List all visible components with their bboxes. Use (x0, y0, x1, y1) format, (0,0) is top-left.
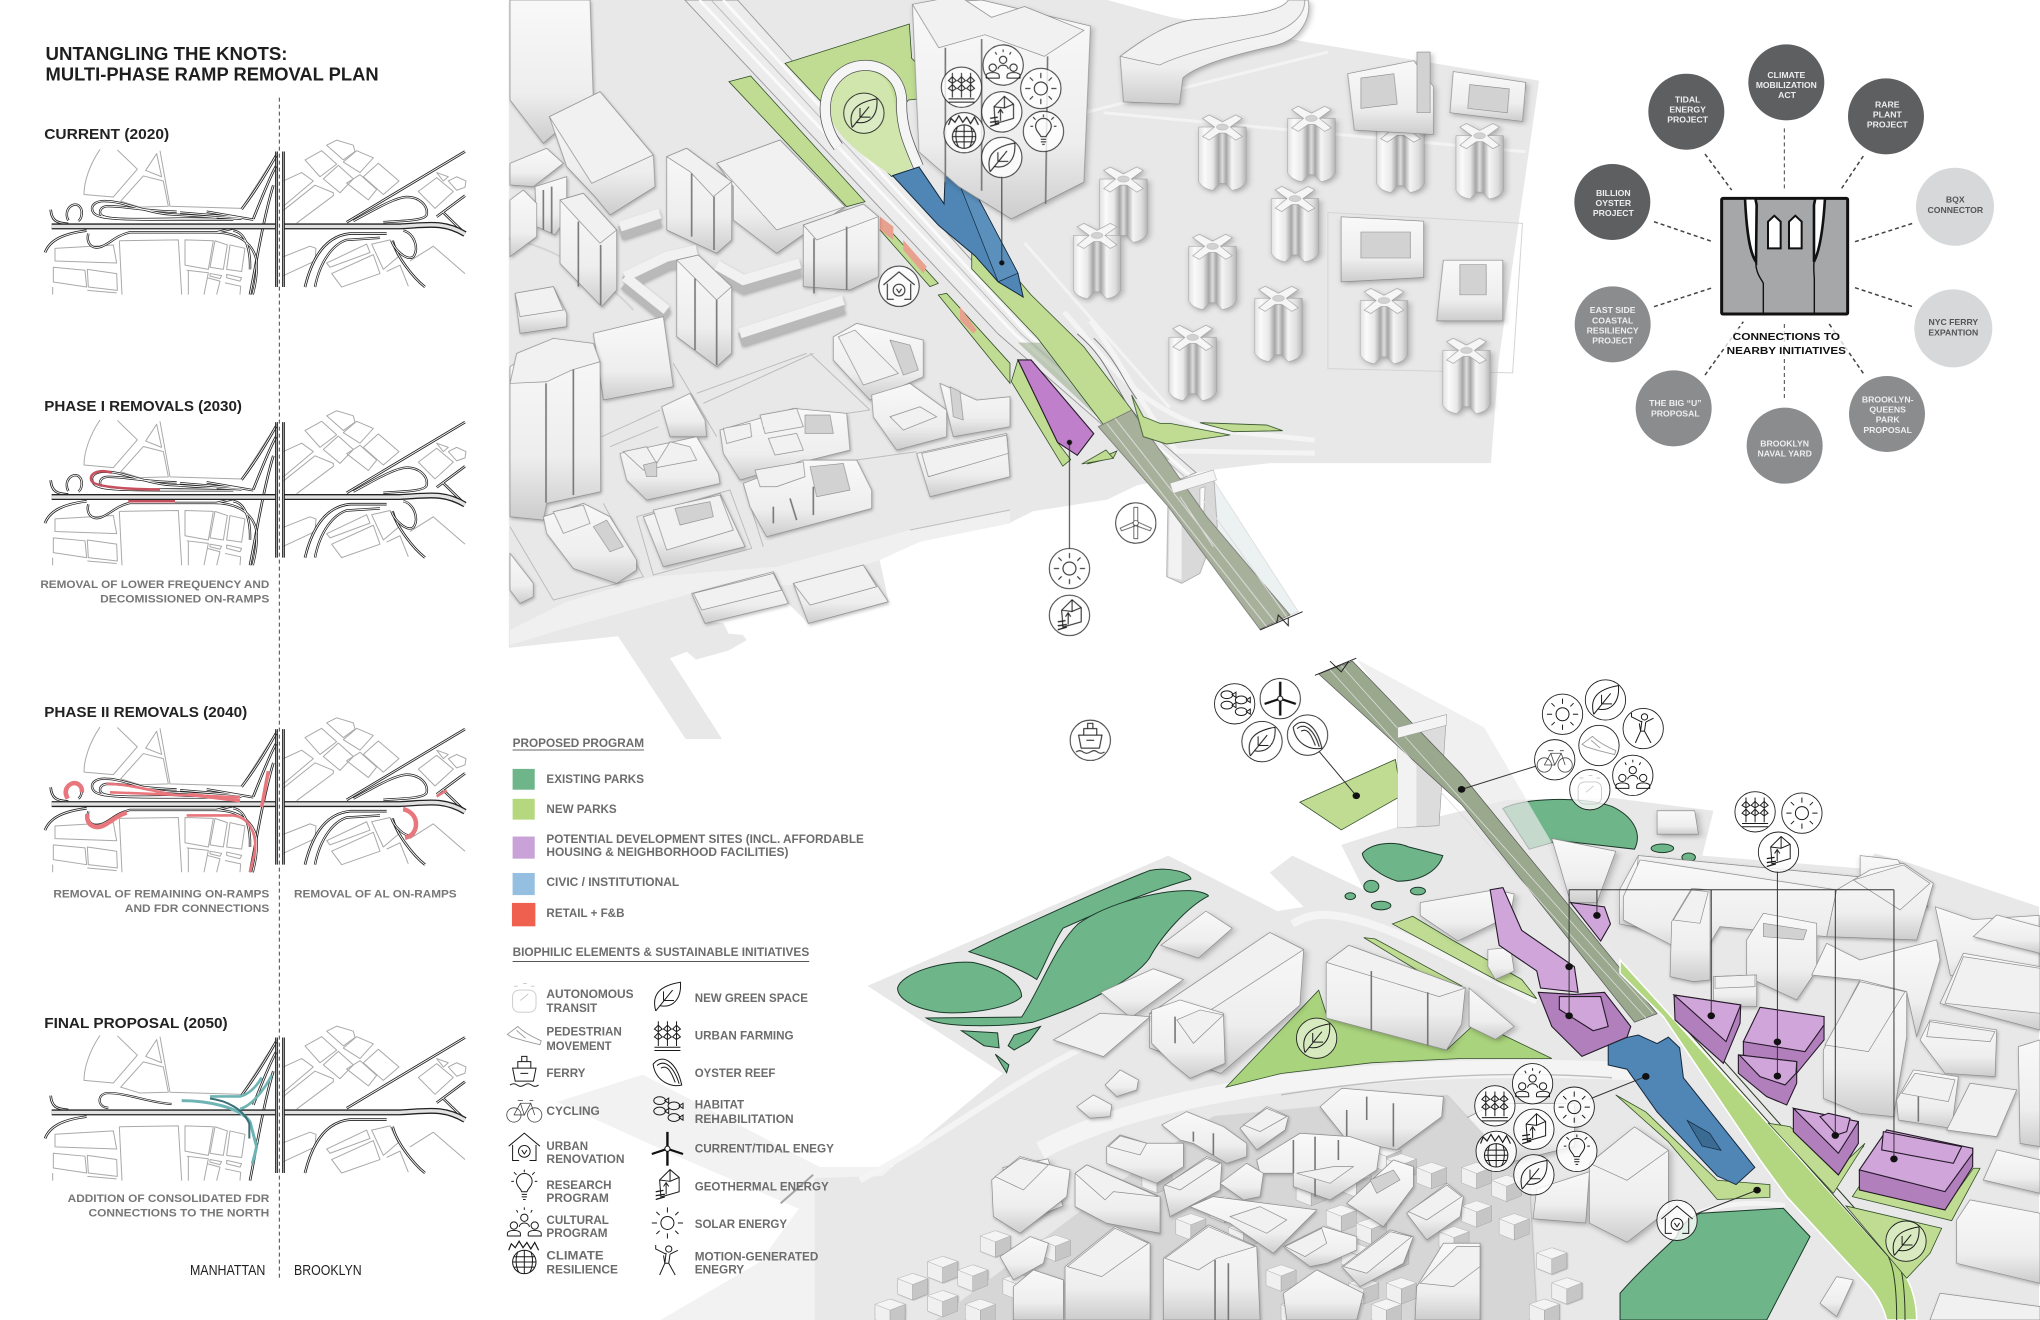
initiative: NYC Ferry Expantion: NYC FERRY (1928, 317, 1978, 327)
caption: phase II Manhattan: REMOVAL OF REMAINING ON-RAMPS (53, 889, 270, 901)
viaduct green deck (1620, 960, 1917, 1320)
initiative: Brooklyn-Queens Park Proposal: PROPOSAL (1863, 425, 1913, 435)
icon: new green space (1886, 1221, 1926, 1261)
initiative: Billion Oyster Project: BILLION (1596, 188, 1631, 198)
legend item: habitat rehabilitation: REHABILITATION (695, 1113, 794, 1126)
initiative: The Big "U" Proposal: PROPOSAL (1651, 408, 1700, 418)
callout lines (1319, 751, 1894, 1214)
Brooklyn Bridge tower and deck (Manhattan span) (1082, 395, 1303, 630)
lower map callouts (1070, 678, 1926, 1261)
road diagram: final proposal (45, 1026, 466, 1181)
legend item: geothermal energy: GEOTHERMAL ENERGY (695, 1180, 829, 1193)
legend item: civic / institutional: CIVIC / INSTITUTIONAL (546, 876, 679, 889)
initiative: Climate Mobilization Act (1748, 44, 1824, 120)
initiative: Tidal Energy Project: ENERGY (1669, 105, 1706, 115)
teardrop lawn (826, 70, 913, 177)
label: connections to nearby initiatives (1725, 328, 1848, 357)
X-plan towers (1073, 106, 1503, 414)
caption: phase I: REMOVAL OF LOWER FREQUENCY AND (40, 579, 269, 591)
initiative: Billion Oyster Project (1574, 164, 1650, 240)
initiative: East Side Coastal Resiliency Project: EAST SIDE (1590, 305, 1636, 315)
legend item: urban renovation: URBAN (546, 1140, 588, 1153)
icon: climate resilience (1476, 1131, 1516, 1172)
legend item: motion-generated energy: MOTION-GENERATED (695, 1251, 818, 1264)
initiative: Climate Mobilization Act: MOBILIZATION (1756, 80, 1817, 90)
icon: motion-generated energy (1623, 708, 1663, 749)
legend item: new green space: NEW GREEN SPACE (695, 992, 808, 1005)
parks: new parks alongside highway (729, 24, 1010, 383)
caption: phase I: DECOMISSIONED ON-RAMPS (100, 593, 270, 605)
legend item: retail: RETAIL + F&B (546, 907, 624, 920)
initiative: East Side Coastal Resiliency Project (1575, 286, 1651, 362)
legend item: geothermal energy (656, 1170, 829, 1200)
caption: phase II Manhattan (53, 889, 270, 915)
legend item: research program: RESEARCH (546, 1179, 611, 1192)
pale pier structures beneath legend (557, 1075, 899, 1320)
icon: urban renovation (879, 266, 919, 306)
map: Brooklyn waterfront and DUMBO (bottom) (557, 658, 2040, 1320)
road diagram: phase II (45, 718, 466, 872)
initiative: Billion Oyster Project: PROJECT (1593, 208, 1634, 218)
east Brooklyn blocks (1620, 860, 2040, 1320)
south-west low-rise blocks (510, 323, 1010, 623)
caption: phase II Manhattan: AND FDR CONNECTIONS (125, 903, 270, 915)
caption: final proposal: ADDITION OF CONSOLIDATED FDR (68, 1193, 269, 1205)
initiative: Rare Plant Project: PLANT (1873, 109, 1902, 119)
icon: habitat rehabilitation (1215, 684, 1255, 724)
icon: new green space (1585, 680, 1626, 720)
icon: current/tidal energy (1116, 503, 1156, 543)
existing park at south (1620, 1208, 1810, 1320)
icon: geothermal energy (1514, 1109, 1554, 1149)
legend item: cultural program (507, 1207, 609, 1240)
caption: phase I (40, 579, 270, 605)
legend item: civic / institutional (513, 873, 679, 895)
caption: final proposal (68, 1193, 269, 1219)
ramps on the Brooklyn side (1064, 312, 1315, 453)
heading: phase I: PHASE I REMOVALS (2030) (44, 398, 242, 415)
legend item: cycling (507, 1101, 600, 1122)
north Brooklyn buildings (1003, 811, 2039, 1242)
Civic building (blue) (893, 167, 1023, 297)
icon: geothermal energy (982, 92, 1022, 132)
icon: urban farming (1475, 1086, 1515, 1126)
legend item: existing parks (513, 769, 644, 790)
legend item: solar energy (652, 1207, 787, 1239)
icon: cycling (1535, 740, 1575, 780)
heading: final proposal: FINAL PROPOSAL (2050) (44, 1015, 228, 1032)
legend item: pedestrian movement: PEDESTRIAN (546, 1026, 622, 1039)
panel: connections to nearby initiatives (1574, 44, 1994, 484)
DUMBO city blocks (992, 1000, 1480, 1320)
initiative: BQX Connector: BQX (1946, 195, 1965, 205)
icon: research program (1557, 1131, 1597, 1172)
initiative: Tidal Energy Project: TIDAL (1675, 95, 1701, 105)
heading: current: CURRENT (2020) (44, 126, 169, 143)
low snake blocks (620, 213, 843, 340)
heading: phase II: PHASE II REMOVALS (2040) (44, 704, 247, 721)
caption: phase II Brooklyn: REMOVAL OF AL ON-RAMPS (294, 889, 457, 901)
civic building (blue) (1608, 1035, 1755, 1185)
new park beneath development (1852, 1168, 1980, 1221)
new park south (1846, 1206, 1942, 1278)
initiative: Brooklyn-Queens Park Proposal (1849, 376, 1925, 452)
north-west towers and slabs (510, 0, 878, 400)
icon: new green space (1242, 721, 1282, 762)
initiative: Brooklyn Naval Yard: NAVAL YARD (1757, 449, 1812, 459)
icon: new green space (982, 137, 1022, 178)
north-east buildings (912, 0, 1526, 321)
ground plane (815, 798, 2039, 1320)
initiative: Tidal Energy Project: PROJECT (1667, 115, 1709, 125)
highway band (685, 0, 1196, 483)
development sites (purple, east of viaduct) (1674, 995, 1973, 1210)
icon: solar energy (1021, 68, 1061, 109)
legend item: climate resilience: CLIMATE (546, 1249, 604, 1262)
initiative: Rare Plant Project (1848, 78, 1924, 154)
legend item: oyster reef: OYSTER REEF (695, 1067, 775, 1080)
new park beside development (1768, 1123, 1865, 1193)
icon: ferry (1070, 720, 1110, 760)
initiative: East Side Coastal Resiliency Project: COASTAL (1592, 315, 1634, 325)
icon: new green space (1296, 1018, 1337, 1058)
title (46, 43, 379, 85)
initiative: BQX Connector: CONNECTOR (1927, 205, 1984, 215)
panel: ramp removal plan (40, 43, 466, 1279)
legend item: pedestrian movement (507, 1026, 622, 1053)
legend item: urban renovation: RENOVATION (546, 1153, 624, 1166)
icon: geothermal energy (1049, 595, 1090, 636)
icon: Brooklyn Bridge tower (1722, 198, 1848, 314)
legend item: climate resilience: RESILIENCE (546, 1264, 618, 1277)
top map callouts (844, 45, 1156, 636)
initiative: East Side Coastal Resiliency Project: RESILIENCY (1587, 326, 1639, 336)
icon: geothermal energy (1758, 832, 1799, 872)
development sites (purple, west of viaduct) (1490, 888, 1631, 1056)
initiative: Climate Mobilization Act: CLIMATE (1767, 70, 1805, 80)
legend item: research program (511, 1170, 611, 1205)
icon: cultural program (1613, 755, 1653, 796)
icon: solar energy (1782, 793, 1822, 833)
legend item: urban farming (654, 1021, 794, 1051)
initiative: Brooklyn Naval Yard: BROOKLYN (1760, 438, 1809, 448)
Development site (purple) (1018, 360, 1094, 455)
legend item: new parks: NEW PARKS (546, 803, 617, 816)
legend item: autonomous transit: TRANSIT (546, 1002, 598, 1015)
existing parks (897, 798, 1696, 1074)
icon: new green space (1514, 1155, 1554, 1195)
icon: urban farming (1735, 792, 1775, 832)
label: Manhattan: MANHATTAN (190, 1263, 265, 1279)
looping ramp (825, 65, 918, 167)
icon: research program (1023, 111, 1064, 152)
legend item: potential development sites: HOUSING & NEIGHBORHOOD FACILITIES) (546, 846, 789, 859)
legend item: autonomous transit: AUTONOMOUS (546, 988, 634, 1001)
heading: biophilic elements: BIOPHILIC ELEMENTS & SUSTAINABLE INITIATIVES (513, 946, 809, 959)
initiative: Brooklyn Naval Yard (1747, 408, 1823, 484)
legend item: pedestrian movement: MOVEMENT (546, 1040, 612, 1053)
legend item: climate resilience (509, 1241, 618, 1277)
legend item: potential development sites (513, 833, 864, 859)
legend item: cycling: CYCLING (546, 1105, 600, 1118)
legend item: urban farming: URBAN FARMING (695, 1030, 794, 1043)
legend item: existing parks: EXISTING PARKS (546, 773, 644, 786)
Brooklyn Bridge tower and deck (1315, 658, 1657, 1022)
label: Brooklyn: BROOKLYN (294, 1263, 362, 1279)
ground plane (509, 0, 1539, 739)
initiative: NYC Ferry Expantion (1914, 289, 1992, 367)
legend item: solar energy: SOLAR ENERGY (695, 1218, 787, 1231)
label: connections to nearby initiatives: NEARBY INITIATIVES (1727, 346, 1846, 357)
heading: proposed program: PROPOSED PROGRAM (513, 737, 644, 750)
icon: autonomous transit (1570, 770, 1610, 810)
street network (860, 915, 1785, 1214)
initiative: NYC Ferry Expantion: EXPANTION (1928, 327, 1978, 337)
legend item: current/tidal energy: CURRENT/TIDAL ENEGY (695, 1143, 834, 1156)
parks at ramp landing (1082, 395, 1283, 464)
legend item: potential development sites: POTENTIAL DEVELOPMENT SITES (INCL. AFFORDABLE (546, 833, 864, 846)
initiative: Brooklyn-Queens Park Proposal: QUEENS (1869, 405, 1906, 415)
map: lower Manhattan waterfront and ramps (top) (507, 0, 1539, 739)
legend item: urban renovation (509, 1133, 624, 1166)
initiative: Brooklyn-Queens Park Proposal: BROOKLYN- (1862, 394, 1914, 404)
divider: Manhattan / Brooklyn (278, 98, 280, 1278)
icon: current/tidal energy (1260, 678, 1300, 719)
icon: new green space (844, 93, 884, 133)
panel: legend (507, 737, 864, 1277)
icon: pedestrian movement (1579, 725, 1619, 766)
legend item: new green space (655, 982, 808, 1011)
street network east (1025, 52, 1526, 408)
new parks (1226, 759, 1864, 1200)
icon: urban renovation (1657, 1200, 1697, 1241)
dense row houses (875, 1095, 1582, 1320)
legend item: habitat rehabilitation (654, 1097, 794, 1126)
initiative: The Big "U" Proposal (1636, 370, 1712, 446)
icon: solar energy (1554, 1087, 1594, 1127)
icon: solar energy (1049, 548, 1090, 589)
legend item: autonomous transit (513, 984, 634, 1015)
legend item: current/tidal energy (652, 1132, 834, 1166)
icon: cultural program (1512, 1064, 1553, 1104)
initiative: Rare Plant Project: PROJECT (1867, 119, 1908, 129)
label: connections to nearby initiatives: CONNECTIONS TO (1733, 332, 1840, 343)
initiative: Brooklyn-Queens Park Proposal: PARK (1876, 415, 1900, 425)
icon: cultural program (983, 45, 1023, 85)
dashed connectors (1654, 128, 1913, 398)
caption: final proposal: CONNECTIONS TO THE NORTH (88, 1207, 269, 1219)
legend item: new parks (513, 799, 617, 820)
icon: urban farming (941, 67, 982, 107)
initiative: Billion Oyster Project: OYSTER (1596, 198, 1632, 208)
title: UNTANGLING THE KNOTS: (46, 43, 288, 64)
legend item: cultural program: CULTURAL (546, 1214, 609, 1227)
legend item: habitat rehabilitation: HABITAT (695, 1098, 745, 1111)
road diagram: phase I (45, 411, 466, 565)
parks: new parks east of highway (971, 253, 1138, 467)
title: MULTI-PHASE RAMP REMOVAL PLAN (46, 64, 379, 85)
initiative: Rare Plant Project: RARE (1875, 99, 1900, 109)
initiative: Tidal Energy Project (1648, 74, 1724, 150)
legend item: motion-generated energy (656, 1245, 818, 1277)
legend item: oyster reef (653, 1059, 775, 1086)
callout dots (1353, 786, 1898, 1194)
initiative: East Side Coastal Resiliency Project: PROJECT (1592, 336, 1634, 346)
initiative: BQX Connector (1916, 168, 1994, 246)
legend item: ferry (510, 1056, 586, 1086)
retail patches (880, 217, 977, 333)
waterfront and street network (508, 238, 1010, 600)
initiative: The Big "U" Proposal: THE BIG “U” (1649, 398, 1702, 408)
legend item: cultural program: PROGRAM (546, 1227, 608, 1240)
east Brooklyn massing (1623, 860, 2040, 1320)
legend item: research program: PROGRAM (546, 1192, 609, 1205)
legend item: ferry: FERRY (546, 1067, 586, 1080)
legend item: retail (512, 903, 624, 926)
icon: oyster reef (1287, 715, 1328, 755)
initiative: Climate Mobilization Act: ACT (1778, 90, 1797, 100)
legend item: motion-generated energy: ENEGRY (695, 1264, 744, 1277)
road diagram: current (45, 140, 466, 295)
icon: climate resilience (944, 113, 984, 153)
icon: solar energy (1542, 694, 1583, 734)
